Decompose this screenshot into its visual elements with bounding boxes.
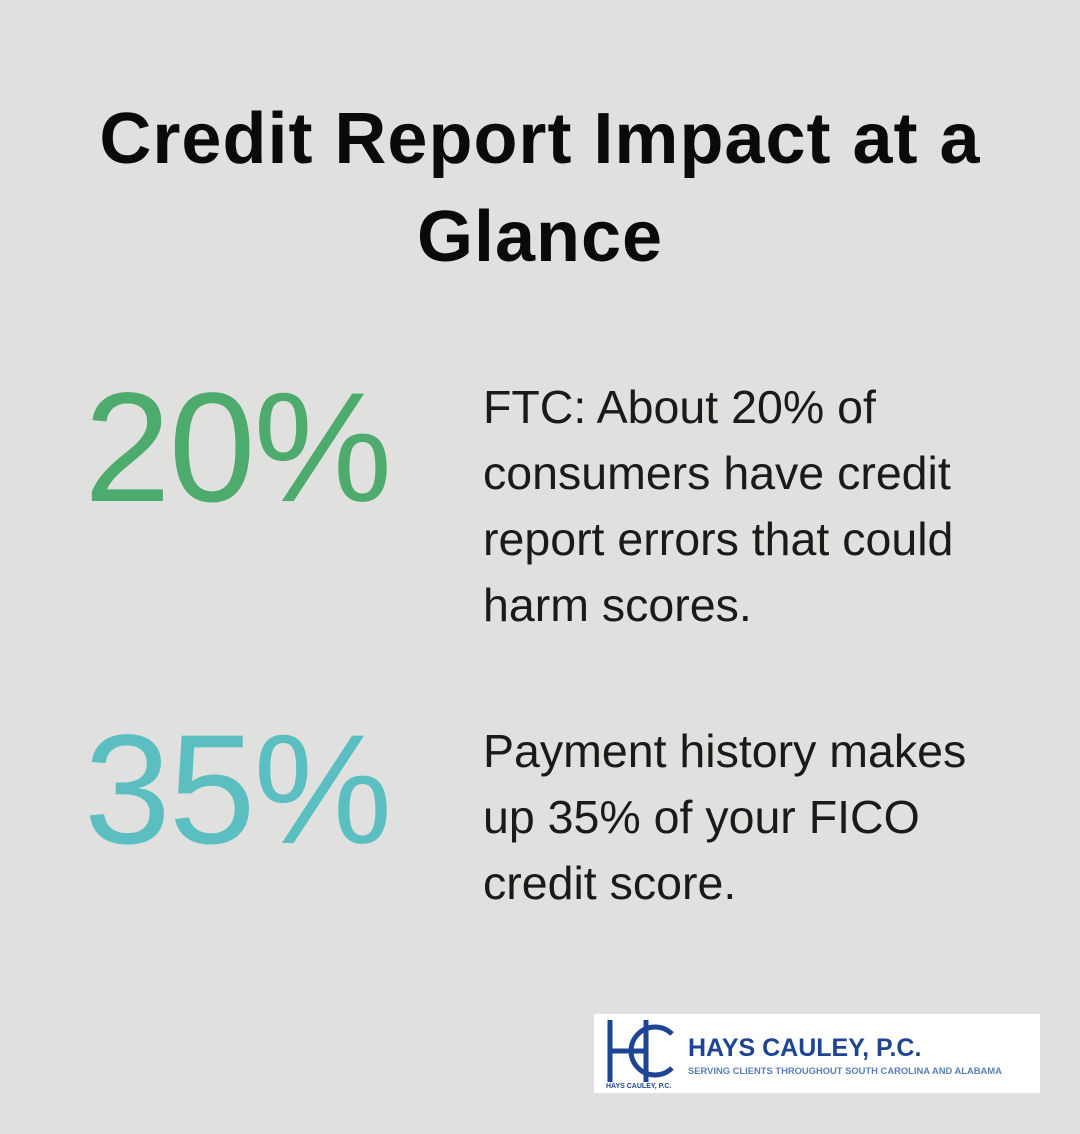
text: tagline: SERVING CLIENTS THROUGHOUT SOUTH CAROLINA AND ALABAMA [688,1065,1002,1076]
text: small firm name: HAYS CAULEY, P.C. [606,1083,671,1090]
text: 20% description: FTC: About 20% of consumers have credit report errors that could harm scores. [483,381,953,631]
title: Credit Report Impact at a [99,99,981,179]
stat: 35%: 35% [84,703,390,877]
icon: HC monogram [608,1020,674,1082]
title: Glance [417,197,663,277]
logo [594,1014,1040,1093]
text: 35% description: Payment history makes up 35% of your FICO credit score. [483,725,966,909]
text: firm name: HAYS CAULEY, P.C. [688,1034,921,1062]
stat: 20%: 20% [84,361,390,535]
title [99,99,981,277]
